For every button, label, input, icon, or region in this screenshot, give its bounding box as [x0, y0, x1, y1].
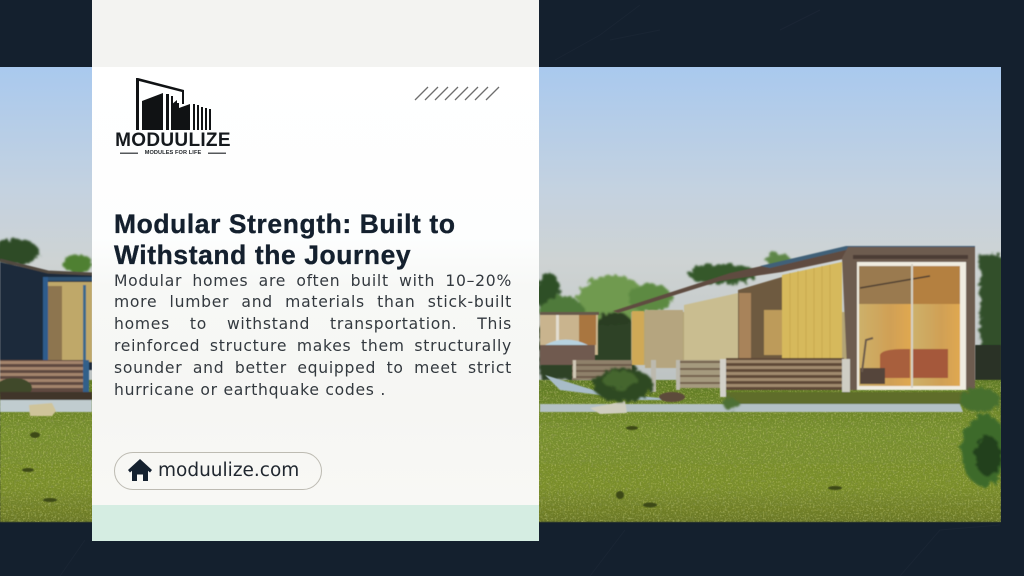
porch fence	[726, 358, 844, 390]
heading	[114, 209, 456, 270]
left path and rock	[0, 400, 92, 412]
shrubs	[593, 368, 1007, 486]
body text block	[114, 272, 512, 399]
tree line	[0, 239, 1006, 385]
body text block: more lumber and materials than stick-built	[114, 293, 512, 311]
lawn texture	[0, 380, 1001, 522]
mint footer band	[92, 505, 539, 541]
body text block: homes to withstand transportation. This	[114, 315, 512, 333]
logo tagline rules	[120, 152, 226, 154]
side box frame	[842, 247, 975, 390]
body text block: sounder and better equipped to meet strict	[114, 359, 512, 377]
sliding glass door	[857, 262, 966, 390]
body text block: hurricane or earthquake codes .	[114, 381, 386, 399]
left house	[0, 262, 92, 370]
heading: Withstand the Journey	[114, 240, 411, 270]
sky	[0, 67, 1001, 392]
website pill	[114, 452, 322, 490]
far house	[540, 312, 599, 315]
panel: white content card	[92, 0, 539, 541]
ground plants near house	[726, 392, 976, 404]
heading: Modular Strength: Built to	[114, 209, 456, 239]
roof	[613, 247, 848, 313]
main path	[540, 404, 963, 412]
body text block: Modular homes are often built with 10–20%	[114, 272, 512, 290]
website url: moduulize.com	[158, 460, 299, 481]
yellow siding	[782, 262, 842, 358]
main house body	[631, 312, 848, 365]
logo wordmark: MODUULIZE	[115, 130, 231, 151]
logo tagline: MODULES FOR LIFE	[145, 150, 201, 156]
body text block: reinforced structure makes them structurally	[114, 337, 512, 355]
lawn	[0, 380, 1001, 522]
